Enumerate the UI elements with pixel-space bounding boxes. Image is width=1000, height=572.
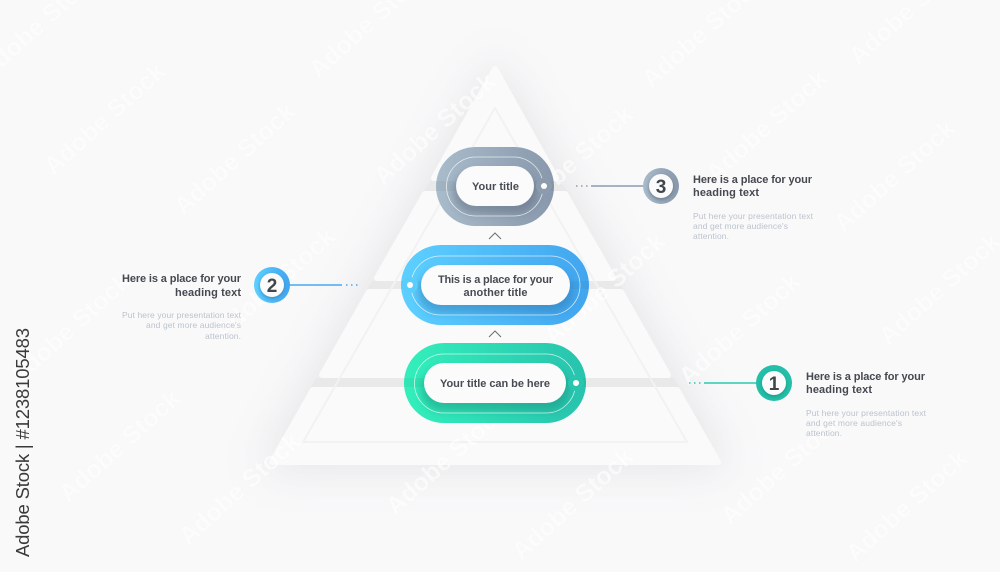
- inner triangle outline: [303, 108, 687, 442]
- body text: attention.: [693, 231, 729, 241]
- watermark pattern: Adobe Stock: [829, 114, 961, 238]
- pill label: [421, 265, 570, 305]
- connector: [288, 284, 359, 286]
- number badge: 3: [656, 177, 666, 198]
- body text: and get more audience's: [693, 221, 788, 231]
- watermark pattern: Adobe Stock: [39, 57, 171, 181]
- heading: Here is a place for your: [693, 174, 813, 186]
- watermark pattern: Adobe Stock: [54, 384, 186, 508]
- pill body: [436, 147, 554, 226]
- watermark pattern: Adobe Stock: [209, 222, 341, 346]
- pill outline: [414, 354, 576, 413]
- tier 4: [272, 390, 718, 462]
- body text: and get more audience's: [806, 418, 902, 428]
- number badge: 1: [769, 374, 780, 395]
- watermark pattern: Adobe Stock: [381, 397, 513, 521]
- callout 2: [122, 267, 359, 341]
- watermark pattern: Adobe Stock: [4, 267, 136, 391]
- body text: attention.: [205, 331, 241, 341]
- heading: heading text: [806, 384, 872, 396]
- watermark pattern: Adobe Stock: [507, 442, 639, 566]
- pill outline: [446, 157, 543, 216]
- tier 1 top: [434, 69, 556, 178]
- body text: Put here your presentation text: [122, 310, 242, 320]
- pill label: [456, 166, 534, 206]
- watermark pattern: Adobe Stock: [169, 97, 301, 221]
- pill: level 2: another title: [464, 287, 528, 299]
- pill: level 3: [436, 147, 554, 226]
- tier gap bands: [311, 181, 679, 387]
- connector: [576, 185, 645, 187]
- pill dot: [407, 282, 413, 288]
- body text: Put here your presentation text: [806, 408, 927, 418]
- body text: attention.: [806, 428, 842, 438]
- number badge: 2: [267, 276, 277, 297]
- pill: level 1: [404, 343, 586, 423]
- watermark pattern: Adobe Stock: [674, 267, 806, 391]
- pill outline: [411, 256, 580, 315]
- callout 3: [576, 168, 814, 241]
- pyramid shadow: [258, 55, 732, 470]
- watermark pattern: Adobe Stock: [841, 444, 973, 568]
- connector: [689, 382, 758, 384]
- watermark pattern: Adobe Stock: [369, 67, 501, 191]
- heading: [122, 273, 242, 299]
- body text: [122, 310, 242, 341]
- vertical stock credit: Adobe Stock | #1238105483: [12, 328, 33, 557]
- pill body: [404, 343, 586, 423]
- pill label: [424, 363, 566, 403]
- callout 1: [689, 365, 927, 438]
- number badge: [254, 267, 290, 303]
- watermark pattern: Adobe Stock: [539, 227, 671, 351]
- pill: level 1: Your title can be here: [440, 378, 550, 390]
- tier 2: [377, 194, 613, 278]
- watermark pattern: Adobe Stock: [716, 407, 848, 531]
- pill: level 2: [401, 245, 589, 325]
- pyramid: [258, 55, 732, 470]
- number badge: [643, 168, 679, 204]
- pill: level 2: This is a place for your: [438, 274, 554, 286]
- pill body: [401, 245, 589, 325]
- chevron: up to level 3: [489, 233, 501, 239]
- watermark pattern: Adobe Stock: [507, 100, 639, 224]
- pill dot: [541, 183, 547, 189]
- number badge: [756, 365, 792, 401]
- tier 3: [322, 292, 668, 375]
- heading: Here is a place for your: [806, 371, 926, 383]
- body text: Put here your presentation text: [693, 211, 814, 221]
- heading: heading text: [693, 187, 759, 199]
- watermark pattern: Adobe Stock: [701, 64, 833, 188]
- pill: level 3: Your title: [472, 181, 519, 193]
- watermark pattern: Adobe Stock: [174, 427, 306, 551]
- pill dot: [573, 380, 579, 386]
- heading: heading text: [175, 287, 241, 299]
- heading: Here is a place for your: [122, 273, 242, 285]
- body text: and get more audience's: [146, 320, 241, 330]
- chevron: up to level 2: [489, 331, 501, 337]
